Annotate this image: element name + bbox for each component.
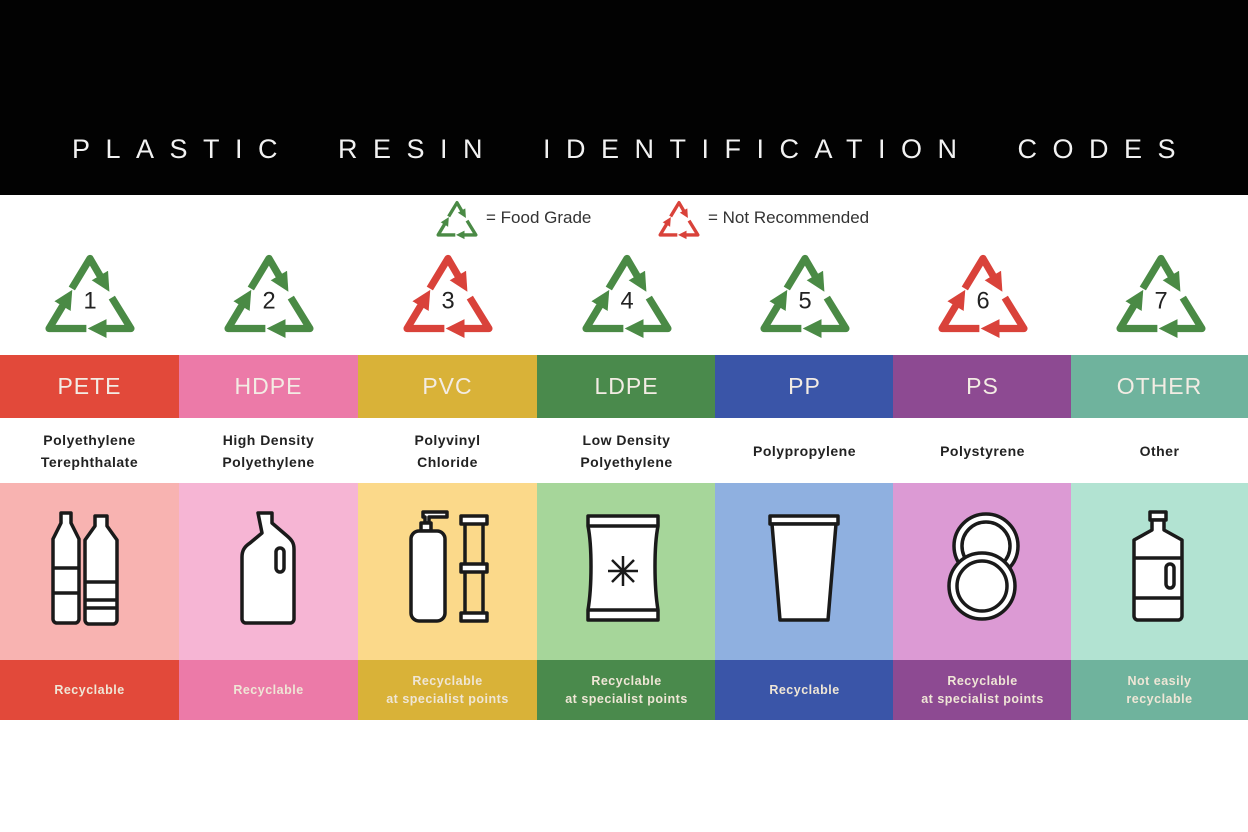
- icon: recycle 4: [582, 254, 672, 338]
- column 3 PVC: [358, 254, 537, 720]
- panel icon: pump bottle and pipe: [358, 483, 537, 660]
- icon: recycle 6: 6: [976, 289, 990, 315]
- icon: recycle 3: 3: [441, 289, 455, 315]
- icon: recycle 2: 2: [262, 289, 276, 315]
- icon: recycle 5: 5: [798, 289, 812, 315]
- footer: [715, 660, 894, 720]
- footer: Recyclable: [412, 674, 483, 688]
- panel icon: cup: [715, 483, 894, 660]
- band HDPE: HDPE: [235, 373, 302, 399]
- footer: [0, 660, 179, 720]
- panel icon: bag: [537, 483, 716, 660]
- footer: Recyclable: [233, 683, 304, 697]
- name: [41, 432, 138, 470]
- band LDPE: [537, 355, 716, 418]
- legend: food grade: = Food Grade: [486, 208, 591, 227]
- band PETE: [0, 355, 179, 418]
- name: Polystyrene: [940, 443, 1025, 459]
- band PVC: PVC: [422, 373, 473, 399]
- title: PLASTIC RESIN IDENTIFICATION CODES: [72, 134, 1191, 164]
- band OTHER: [1071, 355, 1248, 418]
- name: Polyethylene: [222, 454, 315, 470]
- band PS: PS: [966, 373, 999, 399]
- band PS: [893, 355, 1072, 418]
- name: Polypropylene: [753, 443, 856, 459]
- name: Polyvinyl: [415, 432, 480, 448]
- footer: at specialist points: [565, 692, 688, 706]
- icon: recycle 3: [404, 254, 492, 338]
- footer: [179, 660, 358, 720]
- footer: at specialist points: [921, 692, 1044, 706]
- header bar: [0, 0, 1248, 195]
- footer: Recyclable: [591, 674, 662, 688]
- footer: Recyclable: [947, 674, 1018, 688]
- footer: at specialist points: [386, 692, 509, 706]
- icon: recycle 6: [938, 254, 1028, 338]
- name: Low Density: [583, 432, 670, 448]
- footer: Recyclable: [54, 683, 125, 697]
- footer: Not easily: [1127, 674, 1192, 688]
- column 1 PETE: [0, 254, 179, 720]
- footer: [893, 660, 1072, 720]
- column 4 LDPE: [537, 254, 715, 720]
- footer: [358, 660, 537, 720]
- column 6 PS: [893, 254, 1071, 720]
- panel icon: plates: [893, 483, 1072, 660]
- name: Terephthalate: [41, 454, 138, 470]
- panel icon: jug: [179, 483, 358, 660]
- legend: not recommended: [658, 200, 869, 240]
- legend: [436, 200, 869, 240]
- name: [580, 432, 673, 470]
- footer: recyclable: [1126, 692, 1193, 706]
- column 7 OTHER: [1071, 254, 1248, 720]
- name: [415, 432, 480, 470]
- name: [222, 432, 315, 470]
- panel icon: water jug: [1071, 483, 1248, 660]
- footer: Recyclable: [769, 683, 840, 697]
- icon: recycle 1: 1: [83, 289, 97, 315]
- name: Polyethylene: [580, 454, 673, 470]
- name: Chloride: [417, 454, 478, 470]
- footer: [1071, 660, 1248, 720]
- footer: [537, 660, 716, 720]
- icon: recycle 7: [1116, 254, 1206, 338]
- name: Polyethylene: [43, 432, 136, 448]
- name: High Density: [223, 432, 314, 448]
- column 5 PP: [715, 254, 893, 720]
- band PVC: [358, 355, 537, 418]
- column 2 HDPE: [179, 254, 358, 720]
- name: Other: [1140, 443, 1179, 459]
- band PETE: PETE: [57, 373, 122, 399]
- icon: recycle 5: [760, 254, 850, 338]
- band PP: [715, 355, 894, 418]
- band PP: PP: [788, 373, 821, 399]
- legend: food grade: [436, 200, 591, 240]
- icon: recycle 2: [224, 254, 314, 338]
- icon: recycle 4: 4: [620, 289, 634, 315]
- band LDPE: LDPE: [594, 373, 659, 399]
- icon: recycle 1: [46, 254, 135, 338]
- legend: not recommended: = Not Recommended: [708, 208, 869, 227]
- panel icon: bottles: [0, 483, 179, 660]
- band HDPE: [179, 355, 358, 418]
- band OTHER: OTHER: [1117, 373, 1202, 399]
- icon: recycle 7: 7: [1154, 289, 1168, 315]
